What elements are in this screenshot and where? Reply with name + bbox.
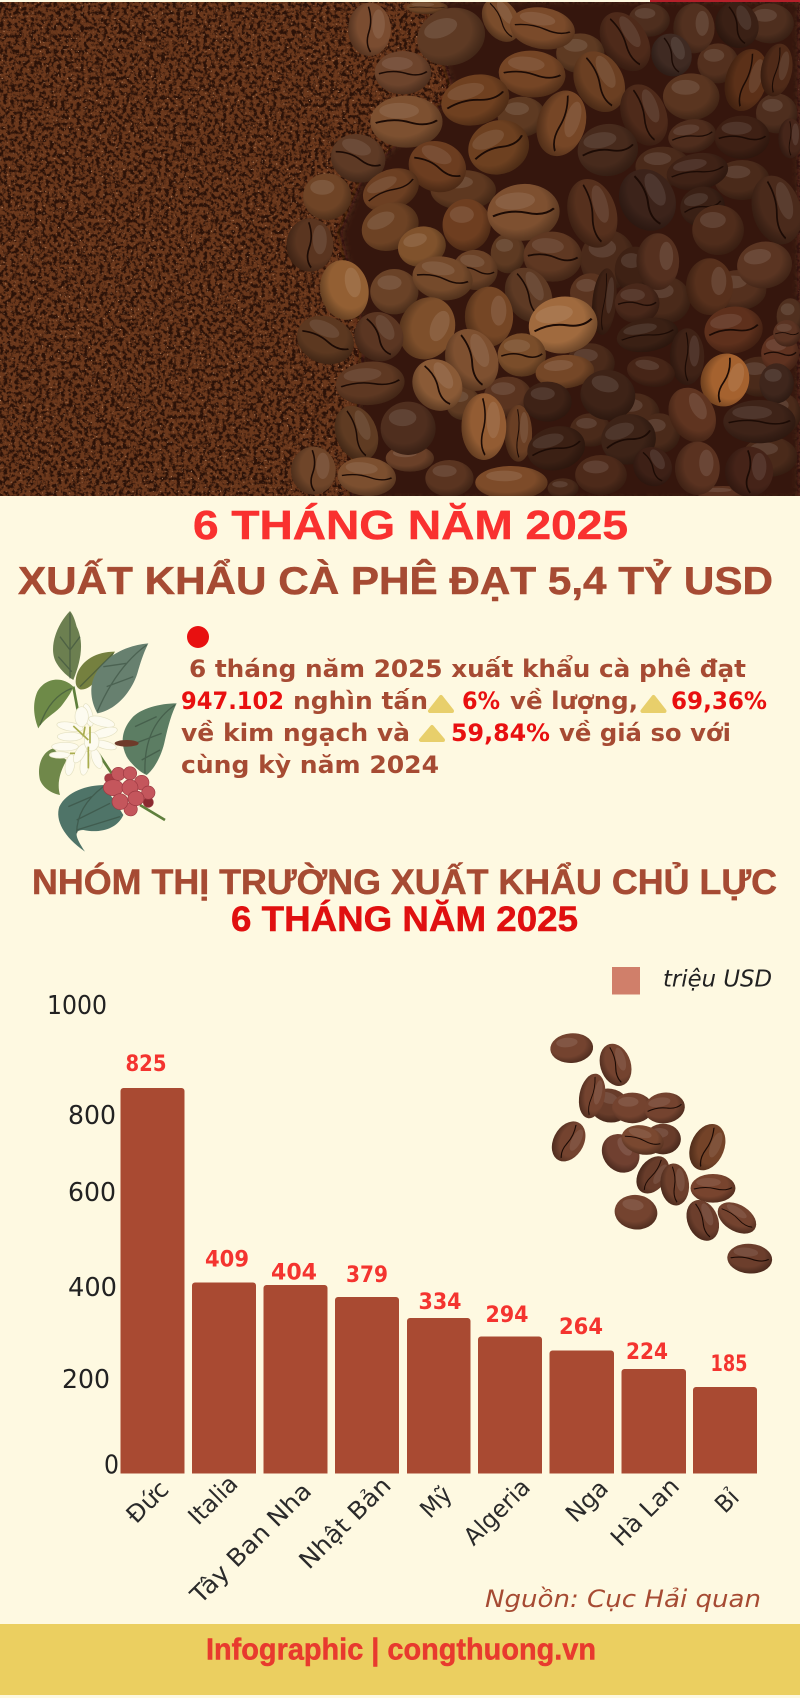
section heading bbox=[32, 862, 777, 939]
illustration: coffee branch with leaves, flowers and berries bbox=[34, 611, 177, 852]
x axis labels: Tây Ban Nha bbox=[184, 1477, 317, 1610]
leaf bbox=[58, 785, 123, 852]
bar value labels: 379 bbox=[346, 1263, 388, 1288]
section heading: 6 THÁNG NĂM 2025 bbox=[231, 899, 578, 939]
leaf veins bbox=[40, 613, 175, 833]
summary text: cùng kỳ năm 2024 bbox=[181, 751, 439, 779]
y axis labels bbox=[47, 991, 119, 1480]
title line 1: 6 THÁNG NĂM 2025 bbox=[193, 502, 628, 548]
berries bbox=[103, 767, 155, 816]
y axis labels: 600 bbox=[68, 1178, 116, 1208]
footer band bbox=[0, 1624, 800, 1695]
x axis labels: Hà Lan bbox=[605, 1472, 685, 1552]
bar value labels: 264 bbox=[559, 1315, 603, 1340]
bar value labels: 409 bbox=[205, 1248, 249, 1272]
icon: up triangle bbox=[430, 697, 452, 711]
summary text: 947.102 bbox=[181, 687, 284, 715]
leaf bbox=[76, 652, 115, 690]
summary text: 6 tháng năm 2025 xuất khẩu cà phê đạt bbox=[189, 653, 746, 683]
flowers bbox=[49, 703, 118, 776]
summary text: nghìn tấn bbox=[293, 687, 428, 715]
title line 2: XUẤT KHẨU CÀ PHÊ ĐẠT 5,4 TỶ USD bbox=[18, 558, 773, 603]
leaf bbox=[91, 643, 148, 713]
x axis labels: Italia bbox=[183, 1470, 243, 1530]
bar value labels bbox=[126, 1052, 748, 1377]
summary text: 59,84% bbox=[451, 719, 550, 747]
source note: Nguồn: Cục Hải quan bbox=[485, 1585, 761, 1613]
section heading: NHÓM THỊ TRƯỜNG XUẤT KHẨU CHỦ LỰC bbox=[32, 862, 777, 902]
insect bbox=[115, 740, 139, 747]
bar value labels: 334 bbox=[418, 1290, 462, 1315]
bar value labels: 294 bbox=[486, 1303, 528, 1328]
hero photo: coffee grounds and roasted beans bbox=[0, 0, 800, 500]
x axis labels: Algeria bbox=[458, 1473, 536, 1551]
summary text: về kim ngạch và bbox=[181, 719, 410, 747]
bar value labels: 224 bbox=[626, 1340, 668, 1365]
icon: up triangle bbox=[421, 727, 443, 740]
leaf bbox=[34, 680, 73, 728]
summary text: 6% bbox=[462, 687, 500, 715]
y axis labels: 400 bbox=[68, 1273, 117, 1303]
x axis labels: Đức bbox=[121, 1475, 174, 1529]
leaf bbox=[53, 611, 81, 680]
legend bbox=[612, 966, 772, 994]
y axis labels: 800 bbox=[68, 1101, 116, 1131]
icon: up triangle bbox=[642, 697, 664, 711]
y axis labels: 200 bbox=[62, 1365, 110, 1395]
summary text: về lượng, bbox=[510, 687, 638, 715]
bar value labels: 404 bbox=[271, 1260, 317, 1286]
decorative photo: scattered coffee beans bbox=[545, 1032, 773, 1275]
bar chart bbox=[120, 1088, 757, 1474]
y axis labels: 1000 bbox=[47, 991, 107, 1021]
bullet dot bbox=[187, 626, 209, 648]
summary text: về giá so với bbox=[559, 719, 731, 747]
leaf bbox=[39, 748, 67, 795]
x axis labels: Bỉ bbox=[709, 1483, 745, 1519]
summary text: 69,36% bbox=[671, 687, 767, 715]
y axis labels: 0 bbox=[104, 1450, 119, 1480]
x axis labels: Mỹ bbox=[414, 1480, 458, 1524]
legend: triệu USD bbox=[663, 966, 772, 992]
bar value labels: 185 bbox=[710, 1352, 748, 1377]
x axis labels bbox=[121, 1470, 745, 1610]
leaf bbox=[123, 703, 177, 775]
x axis labels: Nhật Bản bbox=[293, 1471, 397, 1575]
x axis labels: Nga bbox=[560, 1474, 614, 1528]
bar value labels: 825 bbox=[126, 1052, 166, 1077]
summary text bbox=[181, 653, 767, 779]
footer band: Infographic | congthuong.vn bbox=[206, 1632, 596, 1666]
